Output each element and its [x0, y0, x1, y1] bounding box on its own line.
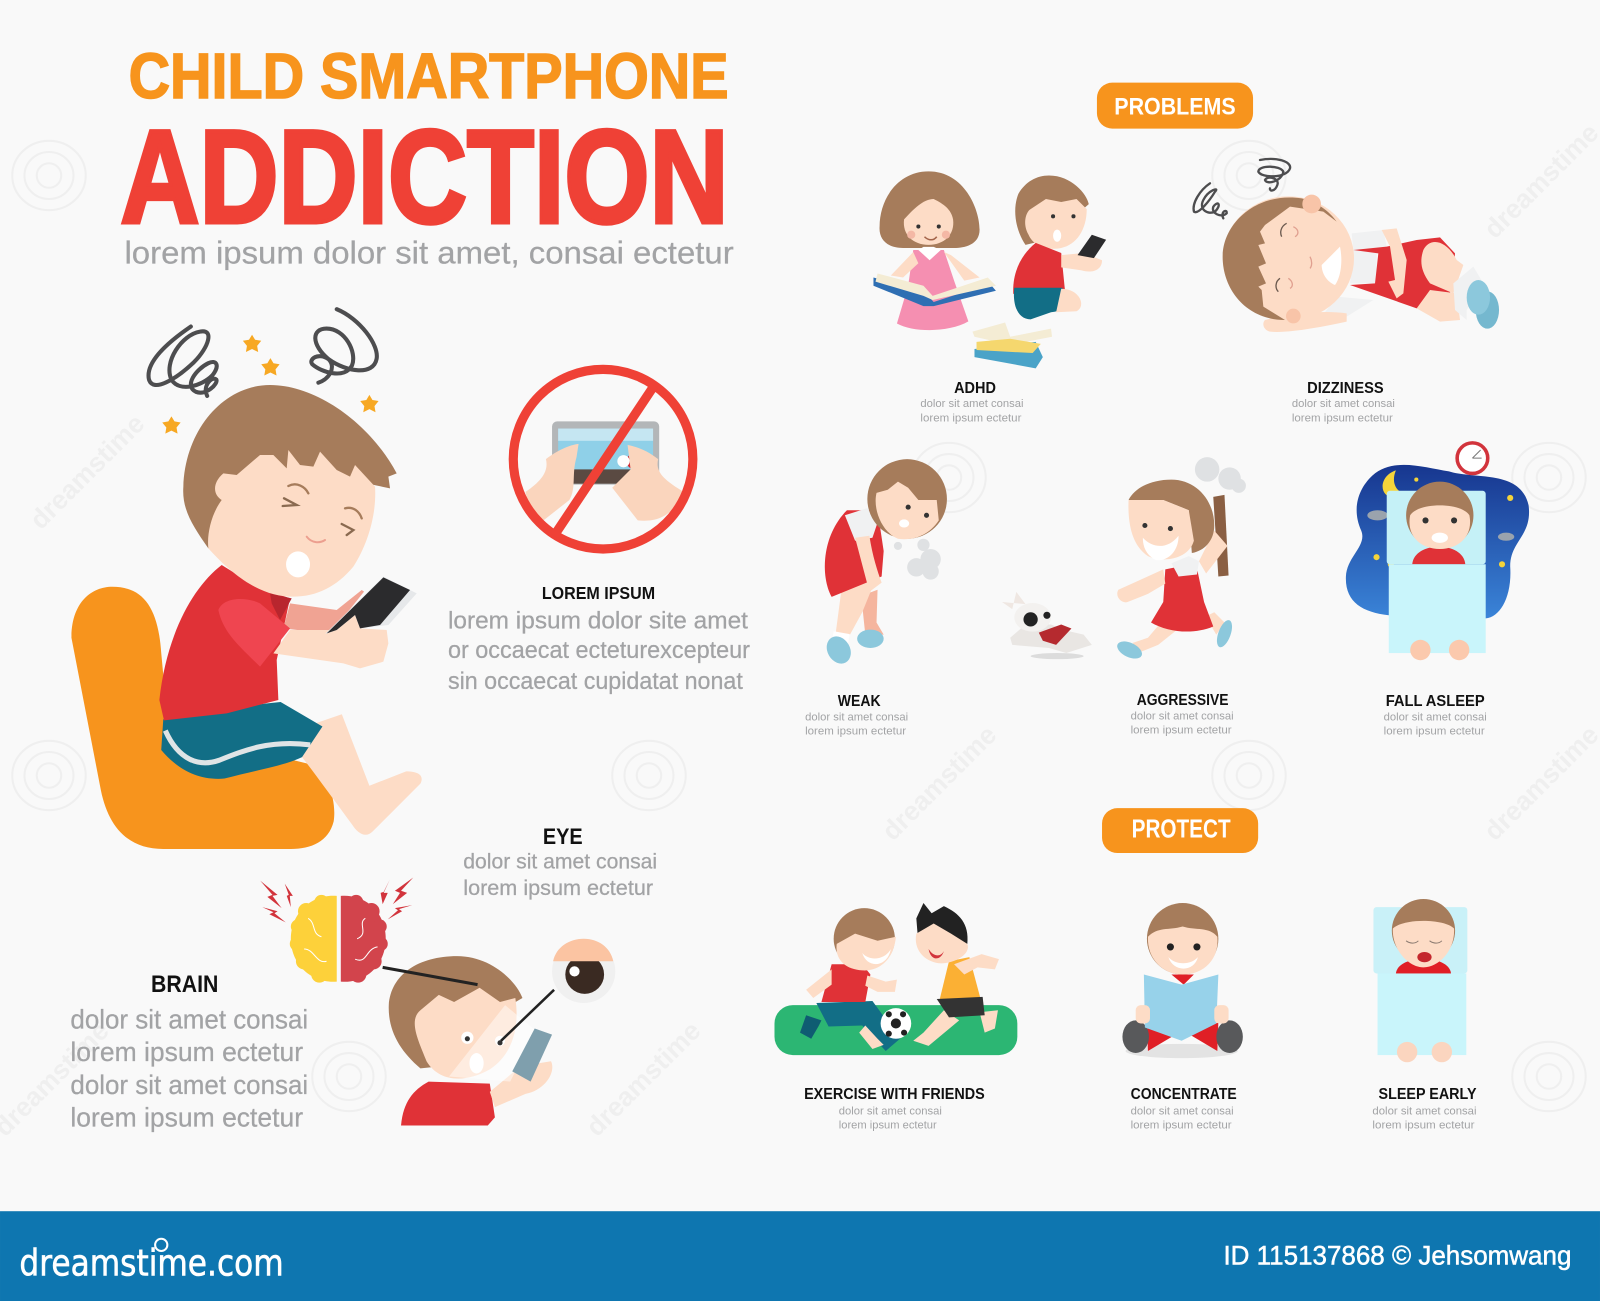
illustration: boy with phone, brain and eye callouts: [383, 939, 615, 1125]
text block: brain: BRAIN: [151, 971, 218, 998]
label: ADHD: lorem ipsum ectetur: [920, 412, 1022, 424]
illustration: concentrate: [1122, 903, 1243, 1058]
label: aggressive: dolor sit amet consai: [1131, 710, 1234, 722]
illustration: sleep early: [1373, 899, 1467, 1062]
text block: eye: EYE: [543, 824, 583, 849]
label: sleep early: lorem ipsum ectetur: [1372, 1120, 1475, 1132]
label: weak: lorem ipsum ectetur: [805, 726, 906, 738]
badge: problems: PROBLEMS: [1114, 93, 1236, 120]
label: fall asleep: dolor sit amet consai: [1384, 711, 1487, 723]
label: aggressive: lorem ipsum ectetur: [1131, 725, 1232, 737]
text block: lorem ipsum: sin occaecat cupidatat nonat: [448, 668, 743, 695]
text block: lorem ipsum: [448, 583, 750, 695]
text: dreamstime: [580, 1016, 706, 1142]
icon: no smartphone games: [513, 369, 693, 549]
text block: brain: lorem ipsum ectetur: [70, 1103, 303, 1133]
text block: lorem ipsum: LOREM IPSUM: [542, 583, 655, 603]
label: weak: WEAK: [838, 693, 881, 710]
text block: eye: [463, 824, 657, 900]
text block: lorem ipsum: lorem ipsum dolor site amet: [448, 608, 748, 635]
label: fall asleep: FALL ASLEEP: [1386, 693, 1485, 710]
label: weak: [805, 693, 908, 738]
text: dreamstime: [24, 408, 150, 535]
illustration: weak: [822, 459, 947, 668]
illustration: ADHD: [873, 171, 1106, 368]
illustration: fall asleep: [1346, 443, 1529, 660]
badge: protect: [1102, 808, 1258, 853]
illustration: boy on chair using smartphone: [71, 385, 422, 849]
icon: dizzy scribbles and stars: [149, 309, 379, 434]
badge: problems: [1097, 83, 1253, 129]
label: dizziness: DIZZINESS: [1307, 380, 1384, 397]
label: concentrate: CONCENTRATE: [1131, 1086, 1237, 1103]
label: weak: dolor sit amet consai: [805, 711, 908, 723]
illustration: exercise with friends: [774, 903, 1017, 1055]
subtitle: lorem ipsum dolor sit amet, consai ectetur: [125, 234, 734, 270]
label: exercise with friends: [804, 1086, 985, 1132]
title: CHILD SMARTPHONE: [129, 40, 729, 112]
footer bar: ID 115137868 © Jehsomwang: [1223, 1240, 1571, 1270]
text block: brain: lorem ipsum ectetur: [70, 1037, 303, 1067]
text block: brain: dolor sit amet consai: [70, 1005, 308, 1035]
label: dizziness: [1292, 380, 1395, 424]
text block: eye: dolor sit amet consai: [463, 849, 657, 873]
text block: brain: [70, 971, 308, 1133]
label: fall asleep: [1384, 693, 1487, 738]
label: concentrate: lorem ipsum ectetur: [1131, 1120, 1232, 1132]
label: dizziness: dolor sit amet consai: [1292, 398, 1395, 410]
text block: brain: dolor sit amet consai: [70, 1070, 308, 1100]
text block: lorem ipsum: or occaecat ecteturexcepteur: [448, 637, 750, 664]
label: aggressive: [1131, 692, 1234, 737]
illustration: dizziness: [1194, 159, 1499, 332]
title: [120, 40, 729, 251]
label: sleep early: dolor sit amet consai: [1372, 1105, 1477, 1117]
illustration: aggressive: [1115, 457, 1246, 662]
illustration: dog: [1002, 592, 1092, 659]
label: concentrate: dolor sit amet consai: [1131, 1105, 1234, 1117]
label: ADHD: ADHD: [954, 380, 996, 397]
label: fall asleep: lorem ipsum ectetur: [1384, 726, 1485, 738]
label: ADHD: [920, 380, 1023, 424]
label: aggressive: AGGRESSIVE: [1137, 692, 1229, 709]
text block: eye: lorem ipsum ectetur: [463, 876, 653, 900]
label: sleep early: SLEEP EARLY: [1379, 1086, 1477, 1103]
label: sleep early: [1372, 1086, 1477, 1132]
label: exercise with friends: EXERCISE WITH FRIENDS: [804, 1086, 985, 1103]
label: ADHD: dolor sit amet consai: [920, 398, 1023, 410]
label: dizziness: lorem ipsum ectetur: [1292, 412, 1393, 424]
badge: protect: PROTECT: [1132, 816, 1231, 844]
label: concentrate: [1131, 1086, 1237, 1132]
label: exercise with friends: dolor sit amet consai: [839, 1105, 942, 1117]
text: dreamstime: [876, 720, 1002, 846]
label: exercise with friends: lorem ipsum ectetur: [839, 1120, 937, 1132]
title: ADDICTION: [120, 103, 729, 251]
footer bar: dreamstime.com: [19, 1241, 284, 1284]
footer bar: [0, 1211, 1600, 1301]
icon: brain with lightning: [260, 878, 413, 983]
